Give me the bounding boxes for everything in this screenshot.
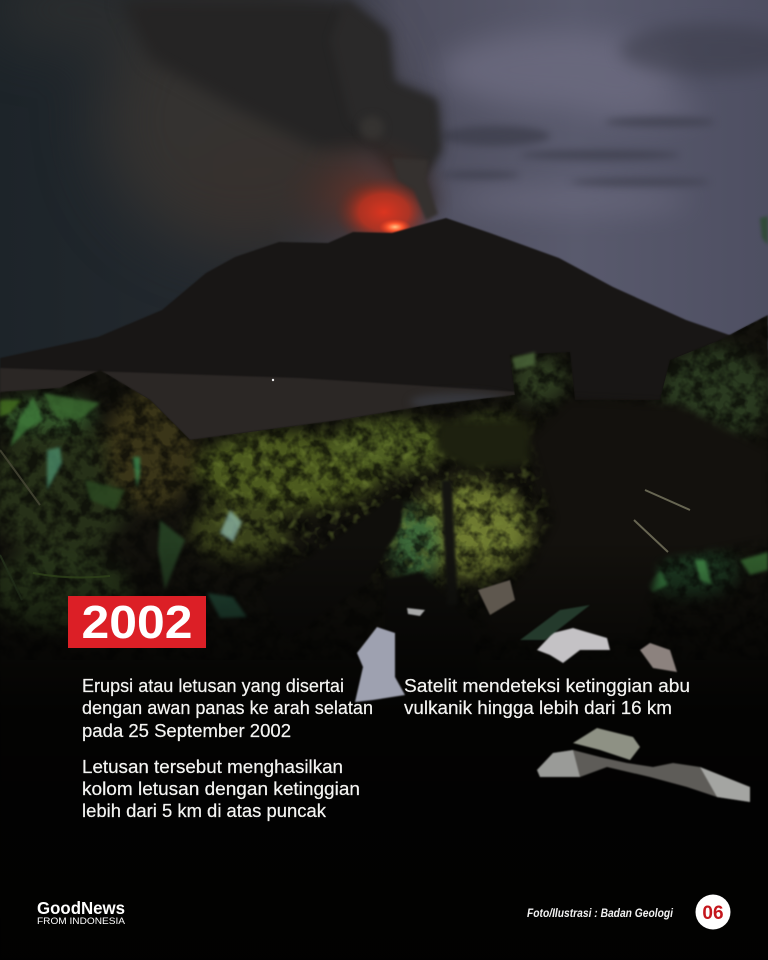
photo credit: Foto/Ilustrasi : Badan Geologi — [527, 906, 674, 920]
year text: 2002 — [82, 596, 192, 648]
eruption glow — [275, 130, 455, 260]
bright leaves — [0, 216, 768, 618]
stems — [0, 450, 110, 600]
logo: GoodNews from Indonesia: GoodNews — [37, 898, 125, 918]
logo: GoodNews from Indonesia: FROM INDONESIA — [37, 916, 125, 926]
page number badge: 06 — [702, 903, 724, 924]
smoke plume — [0, 0, 440, 250]
ash column above the crater — [392, 158, 438, 220]
text block: eruption description — [82, 676, 373, 741]
pale leaf flecks — [200, 425, 550, 600]
volcano silhouette — [0, 218, 768, 420]
logo: GoodNews from Indonesia — [37, 898, 125, 926]
text block: eruption description: Erupsi atau letusan yang disertai — [82, 676, 344, 696]
sky — [0, 0, 768, 400]
dark banana leaves and canopy — [260, 480, 480, 680]
text block: eruption column: kolom letusan dengan ketinggian — [82, 779, 360, 799]
text block: eruption column — [82, 757, 360, 821]
text block: satellite detection: Satelit mendeteksi ketinggian abu — [404, 676, 690, 696]
text block: eruption description: pada 25 September 2002 — [82, 721, 291, 741]
foliage base — [0, 315, 768, 960]
pale debris and roofing — [355, 580, 750, 802]
leaf speckle texture — [0, 318, 768, 630]
foliage colour masses — [0, 318, 768, 632]
text block: eruption column: lebih dari 5 km di atas puncak — [82, 801, 327, 821]
water — [0, 368, 520, 450]
text block: satellite detection — [404, 676, 690, 718]
text block: eruption description: dengan awan panas ke arah selatan — [82, 698, 373, 718]
pale branch strokes — [634, 490, 690, 552]
text block: eruption column: Letusan tersebut menghasilkan — [82, 757, 343, 777]
text block: satellite detection: vulkanik hingga lebih dari 16 km — [404, 698, 672, 718]
year badge — [68, 596, 206, 648]
bottom dark gradient — [0, 540, 768, 960]
page number badge — [696, 894, 730, 930]
